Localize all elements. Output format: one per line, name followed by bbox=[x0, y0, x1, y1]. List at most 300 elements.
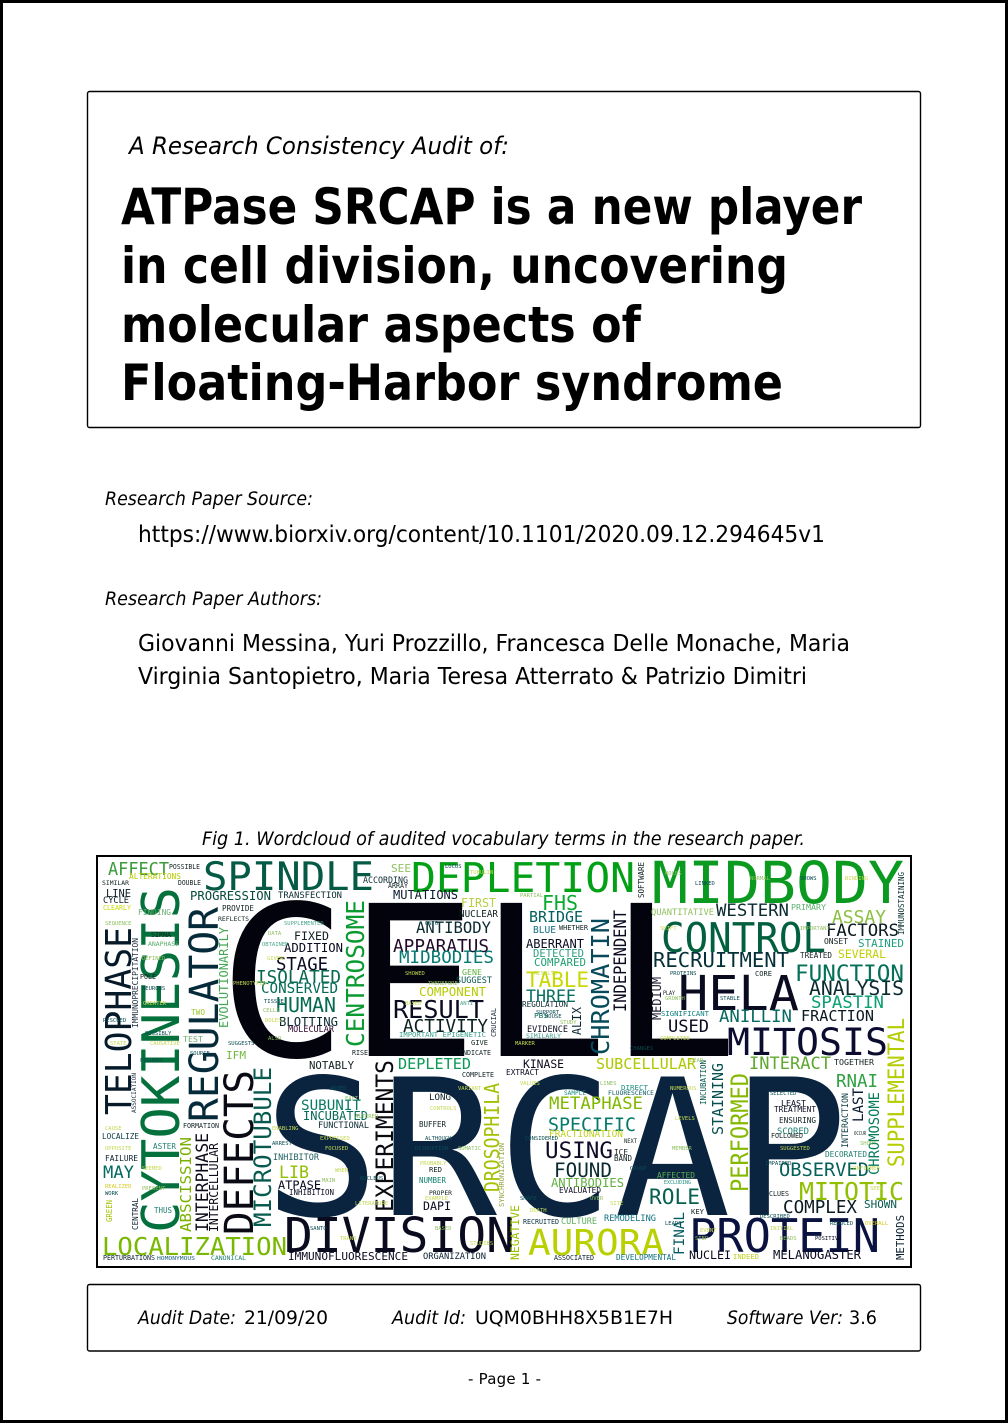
medium words: STAINED bbox=[858, 937, 904, 950]
medium words: ARRAY bbox=[388, 882, 408, 890]
medium words: IMMUNOSTAINING bbox=[897, 872, 906, 935]
medium words: INTERCELLULAR bbox=[207, 1142, 221, 1232]
medium words: CORE bbox=[755, 970, 772, 978]
panel: title box bbox=[88, 92, 920, 428]
small filler words: OVERALL bbox=[865, 1221, 889, 1227]
small filler words: ADDED bbox=[330, 1086, 347, 1092]
medium words: NUCLEI bbox=[689, 1248, 731, 1262]
medium words: CENTRAL bbox=[131, 1198, 140, 1230]
medium words: CYCLE bbox=[103, 896, 129, 906]
small filler words: WHEN bbox=[335, 1168, 348, 1174]
medium words: MEDIUM bbox=[649, 977, 664, 1020]
medium words: IFM bbox=[226, 1049, 246, 1062]
medium words bbox=[102, 860, 907, 1263]
large words: CHROMATIN bbox=[586, 918, 615, 1055]
medium words: FOLLOWED bbox=[771, 1132, 803, 1140]
medium words: ASTER bbox=[153, 1142, 176, 1151]
medium words: NEXT bbox=[624, 1138, 637, 1145]
small filler words: OPPOSITE bbox=[105, 1146, 132, 1152]
small filler words: BEADS bbox=[780, 1236, 797, 1242]
small filler words: IMPORTANT bbox=[800, 926, 830, 932]
medium words: ALTERATIONS bbox=[129, 872, 181, 881]
small filler words: DEFINED bbox=[142, 956, 165, 962]
audit date: Audit Date: bbox=[136, 1307, 236, 1329]
medium words: THREE bbox=[526, 987, 576, 1006]
medium words: NEGATIVE bbox=[508, 1205, 522, 1260]
small filler words: LINES bbox=[600, 1081, 617, 1087]
medium words: DAPI bbox=[423, 1199, 451, 1213]
small filler words bbox=[103, 864, 889, 1247]
small filler words: ANTI bbox=[460, 1001, 473, 1007]
medium words: WESTERN bbox=[716, 901, 789, 921]
medium words: APPARATUS bbox=[393, 936, 489, 957]
small filler words: PRESENT bbox=[142, 1186, 166, 1192]
small filler words: STUDY bbox=[560, 1020, 577, 1026]
medium words: DEVELOPMENTAL bbox=[616, 1253, 676, 1262]
small filler words: SEEN bbox=[870, 1186, 883, 1192]
medium words: DOUBLE bbox=[178, 879, 201, 887]
medium words: MAY bbox=[103, 1163, 134, 1183]
medium words: OCCUR bbox=[854, 1131, 867, 1137]
medium words: SAMPLE bbox=[564, 1090, 586, 1097]
small filler words: ALSO bbox=[268, 1036, 281, 1042]
medium words: HUMAN bbox=[276, 993, 336, 1017]
medium words: RED bbox=[429, 1166, 442, 1174]
medium words: FACTORS bbox=[826, 921, 899, 941]
medium words: AFFECT bbox=[108, 860, 169, 880]
medium words: BRIDGE bbox=[529, 908, 583, 926]
medium words: GREEN bbox=[105, 1200, 114, 1222]
medium words: INCUBATED bbox=[303, 1109, 368, 1123]
small filler words: ENABLING bbox=[272, 1126, 298, 1132]
small filler words: CONSIDERED bbox=[525, 1136, 558, 1142]
medium words: DIRECT bbox=[621, 1084, 649, 1092]
small filler words: SHAPE bbox=[520, 1196, 537, 1202]
medium words: PRIMARY bbox=[791, 903, 826, 912]
medium words: ONSET bbox=[824, 937, 848, 946]
small filler words: VARIANT bbox=[458, 1086, 482, 1092]
medium words: FINDING bbox=[138, 908, 171, 917]
large words: SPINDLE bbox=[203, 855, 374, 900]
small filler words: GROWTH bbox=[665, 996, 685, 1002]
medium words: ABSCISSION bbox=[177, 1137, 195, 1232]
medium words: MOLECULAR bbox=[288, 1025, 335, 1035]
small filler words: DESCRIBED bbox=[760, 1214, 790, 1220]
small filler words: LEVELS bbox=[675, 1116, 695, 1122]
small filler words: INITIAL bbox=[770, 1226, 794, 1232]
medium words: CANONICAL bbox=[211, 1254, 246, 1262]
small filler words: LEADS bbox=[665, 1221, 682, 1227]
large words: LOCALIZATION bbox=[102, 1232, 287, 1261]
small filler words: NUCLEUS bbox=[360, 1176, 383, 1182]
large words: MIDBODY bbox=[652, 849, 904, 917]
small filler words: TUBULIN bbox=[470, 870, 493, 876]
small filler words: PHENOTYPES bbox=[233, 981, 266, 987]
small filler words: LEAD bbox=[690, 1058, 703, 1064]
large words: CENTROSOME bbox=[341, 900, 370, 1047]
medium words: TEST bbox=[183, 1034, 203, 1044]
small filler words: ALTHOUGH bbox=[425, 1136, 452, 1142]
medium words: SOFTWARE bbox=[637, 862, 646, 898]
medium words: INDICATE bbox=[459, 1049, 491, 1057]
medium words: ACCORDING bbox=[363, 875, 408, 885]
medium words: ACTIVITY bbox=[403, 1017, 488, 1037]
medium words: INTERPHASE bbox=[193, 1133, 212, 1232]
medium words: REGULATION bbox=[522, 1000, 568, 1009]
medium words: TREATED bbox=[800, 951, 832, 960]
small filler words: MOUSE bbox=[545, 1014, 562, 1020]
medium words: INTERACTION bbox=[841, 1093, 851, 1148]
medium words: ANTIBODY bbox=[416, 918, 491, 937]
small filler words: MEMBER bbox=[672, 1146, 693, 1152]
small filler words: REDUCED bbox=[830, 1221, 853, 1227]
small filler words: SUGGESTED bbox=[780, 1146, 810, 1152]
medium words: EXTRACT bbox=[506, 1068, 539, 1077]
small filler words: SANTO bbox=[310, 1226, 327, 1232]
medium words: FHS bbox=[542, 891, 578, 915]
small filler words: SOMATIC bbox=[458, 1146, 481, 1152]
heading: molecular aspects of bbox=[121, 296, 642, 354]
medium words: FIXED bbox=[294, 929, 329, 943]
small filler words: ALTERED bbox=[355, 1114, 378, 1120]
medium words: KEY bbox=[691, 1208, 705, 1216]
medium words: INTERACT bbox=[749, 1054, 831, 1074]
heading bbox=[121, 178, 862, 412]
large words: HELA bbox=[678, 966, 799, 1022]
medium words: CHROMOSOME bbox=[867, 1092, 883, 1175]
small filler words: OBTAINED bbox=[262, 942, 288, 948]
medium words: MELANOGASTER bbox=[773, 1248, 862, 1262]
medium words: TREATMENT bbox=[774, 1105, 816, 1114]
medium words: CULTURE bbox=[561, 1217, 597, 1227]
audit date bbox=[136, 1307, 328, 1329]
small filler words: TRANS bbox=[340, 1236, 357, 1242]
figure caption: Fig 1. Wordcloud of audited vocabulary terms in the research paper. bbox=[202, 828, 805, 850]
small filler words: SHIFT bbox=[660, 926, 677, 932]
medium words: BAND bbox=[614, 1154, 632, 1163]
medium words: TWO bbox=[191, 1008, 205, 1017]
medium words: PROPER bbox=[429, 1189, 452, 1197]
audit id: UQM0BHH8X5B1E7H bbox=[475, 1307, 673, 1329]
medium words: FAILURE bbox=[105, 1154, 138, 1163]
medium words: GENE bbox=[462, 968, 482, 977]
medium words: ASSOCIATED bbox=[554, 1254, 594, 1262]
medium words: HOMONYMOUS bbox=[157, 1256, 195, 1262]
medium words: ADDITION bbox=[284, 941, 343, 955]
medium words: BLOTTING bbox=[279, 1015, 338, 1029]
small filler words: REALIZED bbox=[105, 1184, 132, 1190]
small filler words: BASED bbox=[405, 1001, 422, 1007]
medium words: DECORATED bbox=[825, 1150, 867, 1159]
medium words: DEPLETED bbox=[398, 1055, 471, 1073]
medium words: GIVE bbox=[471, 1039, 488, 1047]
medium words: POLE bbox=[140, 973, 156, 981]
small filler words: NUMEROUS bbox=[670, 1086, 696, 1092]
medium words: ENSURING bbox=[779, 1116, 816, 1125]
medium words: EVALUATED bbox=[559, 1186, 601, 1195]
medium words: CLUES bbox=[769, 1190, 789, 1198]
medium words: OBSERVED bbox=[779, 1160, 869, 1181]
medium words: REMODELING bbox=[604, 1214, 656, 1224]
medium words: NOTABLY bbox=[309, 1059, 355, 1072]
medium words: SUBUNIT bbox=[301, 1098, 361, 1114]
small filler words: CAUSE bbox=[105, 1126, 122, 1132]
small filler words: FACT bbox=[345, 1096, 359, 1102]
small filler words: EXPRESSED bbox=[320, 1136, 350, 1142]
small filler words: PROBABLY bbox=[420, 1161, 447, 1167]
medium words: LONG bbox=[429, 1093, 451, 1103]
medium words: COMPONENT bbox=[419, 984, 487, 999]
small filler words: RESCUED bbox=[103, 1018, 126, 1024]
medium words: FOUND bbox=[554, 1159, 612, 1182]
medium words: SEVERAL bbox=[838, 947, 886, 961]
medium words: SEE bbox=[391, 862, 411, 875]
medium words: DETECTED bbox=[533, 948, 584, 960]
small filler words: GIVEN bbox=[267, 956, 284, 962]
medium words: FRACTIONATION bbox=[549, 1129, 623, 1140]
large words: CYTOKINESIS bbox=[132, 887, 192, 1233]
small filler words: THEREFORE bbox=[428, 981, 458, 987]
authors list bbox=[138, 629, 850, 690]
medium words: TRANSFECTION bbox=[278, 891, 342, 901]
medium words: FUNCTION bbox=[795, 962, 904, 987]
subtitle: A Research Consistency Audit of: bbox=[127, 132, 509, 160]
medium words: RECRUITED bbox=[523, 1218, 559, 1226]
medium words: BUFFER bbox=[419, 1120, 446, 1129]
panel: audit footer bbox=[88, 1284, 920, 1351]
medium words: KINASE bbox=[523, 1058, 564, 1071]
medium words: SIGNIFICANT bbox=[661, 1009, 710, 1018]
small filler words: STEP bbox=[695, 1236, 709, 1242]
medium words: STAGE bbox=[276, 955, 328, 975]
small filler words: POSITIVE bbox=[815, 1236, 842, 1242]
medium words: MITOTIC bbox=[799, 1177, 904, 1206]
medium words: PERTURBATIONS bbox=[103, 1254, 155, 1262]
large words: CELL bbox=[218, 861, 738, 1106]
large words: SRCAP bbox=[263, 1039, 848, 1260]
medium words: CLEARLY bbox=[103, 904, 132, 912]
small filler words: FOCUSED bbox=[325, 1146, 348, 1152]
medium words: SPASTIN bbox=[811, 993, 884, 1013]
medium words: POSSIBLE bbox=[169, 863, 200, 871]
medium words: CONSERVED bbox=[261, 981, 338, 997]
medium words: INCUBATION bbox=[699, 1060, 708, 1105]
authors list: Giovanni Messina, Yuri Prozzillo, Francesca Delle Monache, Maria bbox=[138, 629, 850, 657]
medium words: IMPORTANT EPIGENETIC bbox=[399, 1031, 486, 1039]
heading: in cell division, uncovering bbox=[121, 237, 788, 295]
medium words: ANILLIN bbox=[719, 1007, 792, 1027]
large words: MITOSIS bbox=[727, 1021, 888, 1064]
small filler words: DISRUPTION bbox=[415, 1146, 448, 1152]
small filler words: VALUES bbox=[520, 1081, 540, 1087]
medium words: RESULT bbox=[393, 995, 484, 1024]
medium words: EVIDENCE bbox=[527, 1025, 568, 1035]
large words: REGULATOR bbox=[182, 906, 228, 1122]
medium words: RECRUITMENT bbox=[653, 948, 789, 972]
medium words: ANALYSIS bbox=[809, 977, 904, 1000]
large words: DIVISION bbox=[284, 1208, 515, 1264]
medium words: ORGANIZATION bbox=[423, 1252, 486, 1262]
medium words: ANAPHASE bbox=[148, 940, 179, 948]
small filler words: SUGGESTS bbox=[228, 1041, 254, 1047]
medium words: SPECIFIC bbox=[548, 1115, 636, 1136]
audit id bbox=[390, 1307, 673, 1329]
small filler words: STATE bbox=[110, 1041, 127, 1047]
medium words: BLUE bbox=[533, 925, 556, 936]
medium words: SIMILAR bbox=[102, 879, 129, 887]
software version: Software Ver: bbox=[727, 1307, 843, 1329]
small filler words: SOURCE bbox=[190, 1051, 210, 1057]
large words: TELOPHASE bbox=[99, 927, 140, 1115]
medium words: SIMILARLY bbox=[526, 1032, 561, 1040]
small filler words: EXAMPLE bbox=[425, 1196, 448, 1202]
small filler words: DEATH bbox=[530, 1208, 547, 1214]
small filler words: CONTROLS bbox=[430, 1106, 456, 1112]
medium words: EVOLUTIONARILY bbox=[216, 927, 231, 1028]
medium words: LINE bbox=[106, 888, 131, 900]
medium words: WHETHER bbox=[559, 924, 589, 932]
medium words: ICE bbox=[614, 1148, 628, 1157]
wordcloud figure bbox=[97, 849, 911, 1267]
heading: Floating-Harbor syndrome bbox=[121, 354, 783, 412]
large words: PROTEIN bbox=[689, 1209, 880, 1263]
small filler words: CELLS bbox=[263, 1008, 280, 1014]
small filler words: SUPPORT bbox=[536, 1010, 560, 1016]
small filler words: MARKER bbox=[515, 1041, 536, 1047]
medium words: PLAY bbox=[663, 990, 675, 997]
small filler words: RESULTS bbox=[534, 971, 557, 977]
medium words: COMPLETE bbox=[462, 1071, 494, 1079]
small filler words: NORMAL bbox=[750, 876, 771, 882]
medium words: EXCLUDING bbox=[664, 1180, 691, 1186]
medium words: FIRST bbox=[461, 896, 496, 910]
small filler words: POSSIBLY bbox=[145, 1031, 172, 1037]
authors list: Virginia Santopietro, Maria Teresa Atterrato & Patrizio Dimitri bbox=[138, 662, 807, 690]
medium words: FINAL bbox=[672, 1212, 688, 1255]
small filler words: COMPLETED bbox=[660, 1036, 690, 1042]
medium words: REFLECTS bbox=[218, 915, 249, 923]
medium words: AFFECTED bbox=[657, 1171, 695, 1180]
authors label: Research Paper Authors: bbox=[105, 588, 322, 610]
medium words: INDEPENDENT bbox=[611, 910, 631, 1012]
medium words: STAINING bbox=[709, 1063, 727, 1135]
medium words: ASSOCIATION bbox=[130, 1073, 138, 1113]
large words: PERFORMED bbox=[726, 1073, 754, 1192]
source url: https://www.biorxiv.org/content/10.1101/2020.09.12.294645v1 bbox=[138, 520, 825, 548]
large words: SUPPLEMENTAL bbox=[885, 1018, 910, 1167]
source label: Research Paper Source: bbox=[105, 488, 313, 510]
small filler words: BINDING bbox=[845, 876, 868, 882]
small filler words: STUDIES bbox=[470, 1241, 493, 1247]
medium words: IMMUNOPRECIPITATION bbox=[131, 938, 140, 1028]
large words: MICROTUBULE bbox=[249, 1067, 277, 1227]
medium words: LEAST bbox=[781, 1098, 806, 1108]
medium words: QUANTITATIVE bbox=[651, 908, 714, 918]
small filler words: GROUP bbox=[630, 1166, 647, 1172]
medium words: RNAI bbox=[836, 1072, 878, 1092]
small filler words: BASED bbox=[435, 1226, 452, 1232]
large words: CONTROL bbox=[661, 914, 826, 962]
medium words: INDEED bbox=[733, 1253, 759, 1261]
medium words: LAST bbox=[851, 1087, 867, 1122]
small filler words: SEEMED bbox=[142, 1166, 162, 1172]
medium words: SYNCHRONIZATION bbox=[498, 1143, 506, 1207]
medium words: TABLE bbox=[526, 968, 589, 992]
small filler words: ROLES bbox=[265, 1018, 282, 1024]
medium words: RISE bbox=[352, 1049, 368, 1057]
medium words: CRUCIAL bbox=[490, 1008, 498, 1037]
small filler words: SHOWS bbox=[800, 876, 817, 882]
small filler words: STABLE bbox=[720, 996, 740, 1002]
medium words: COMPLEX bbox=[783, 1198, 857, 1218]
small filler words: NEURONS bbox=[142, 986, 165, 992]
small filler words: PROTEINS bbox=[670, 971, 696, 977]
small filler words: PARTIAL bbox=[520, 893, 544, 899]
small filler words: OVER bbox=[590, 1196, 604, 1202]
medium words: INHIBITION bbox=[289, 1188, 334, 1197]
medium words: LIB bbox=[279, 1163, 309, 1182]
audit date: 21/09/20 bbox=[244, 1307, 328, 1329]
small filler words: SHORT bbox=[860, 1141, 877, 1147]
small filler words: LOCUS bbox=[445, 864, 462, 870]
medium words: ASSAY bbox=[832, 907, 886, 928]
medium words: FLUORESCENCE bbox=[608, 1089, 654, 1097]
small filler words: ARREST bbox=[272, 1141, 293, 1147]
medium words: ROLE bbox=[649, 1185, 700, 1209]
software version: 3.6 bbox=[849, 1307, 877, 1329]
heading: ATPase SRCAP is a new player bbox=[121, 178, 862, 236]
medium words: SHOWN bbox=[864, 1198, 897, 1211]
large words: AURORA bbox=[528, 1223, 664, 1264]
small filler words: SEQUENCE bbox=[105, 921, 132, 927]
medium words: IMMUNOFLUORESCENCE bbox=[288, 1250, 408, 1263]
medium words: PROVIDE bbox=[222, 904, 254, 913]
medium words: SUBCELLULAR bbox=[596, 1055, 697, 1073]
medium words: NUMBER bbox=[419, 1176, 446, 1185]
medium words: PROGRESSION bbox=[190, 888, 271, 903]
small filler words: SITE bbox=[610, 1201, 623, 1207]
small filler words: MAIN bbox=[322, 1178, 335, 1184]
medium words: ABERRANT bbox=[526, 937, 584, 951]
medium words: METAPHASE bbox=[549, 1094, 643, 1114]
audit id: Audit Id: bbox=[390, 1307, 466, 1329]
medium words: USED bbox=[668, 1017, 709, 1037]
small filler words: SELECTED bbox=[770, 1091, 796, 1097]
medium words: MIDBODIES bbox=[399, 948, 494, 968]
medium words: SCORED bbox=[777, 1127, 809, 1137]
small filler words: ROLES bbox=[665, 871, 682, 877]
medium words: SIRNA bbox=[151, 931, 171, 939]
medium words: NUCLEAR bbox=[459, 909, 498, 920]
small filler words: CHANGES bbox=[630, 1046, 653, 1052]
small filler words: TISSUE bbox=[264, 999, 284, 1005]
small filler words: SUPPLEMENTED bbox=[284, 921, 324, 927]
small filler words: GREATER bbox=[143, 1001, 167, 1007]
medium words: PBS bbox=[534, 1012, 548, 1020]
medium words: MUTATIONS bbox=[393, 888, 458, 902]
large words: DEPLETION bbox=[411, 854, 635, 902]
medium words: FUNCTIONAL bbox=[318, 1121, 369, 1131]
small filler words: IMPAIRED bbox=[765, 1161, 792, 1167]
small filler words: ONTO bbox=[425, 921, 438, 927]
small filler words: LINKED bbox=[695, 881, 715, 887]
medium words: ALIX bbox=[570, 1006, 584, 1035]
medium words: ATPASE bbox=[278, 1178, 321, 1192]
medium words: INHIBITOR bbox=[273, 1153, 320, 1163]
large words bbox=[99, 849, 910, 1264]
medium words: ISOLATED bbox=[256, 968, 341, 988]
medium words: COMPARED bbox=[534, 956, 586, 969]
